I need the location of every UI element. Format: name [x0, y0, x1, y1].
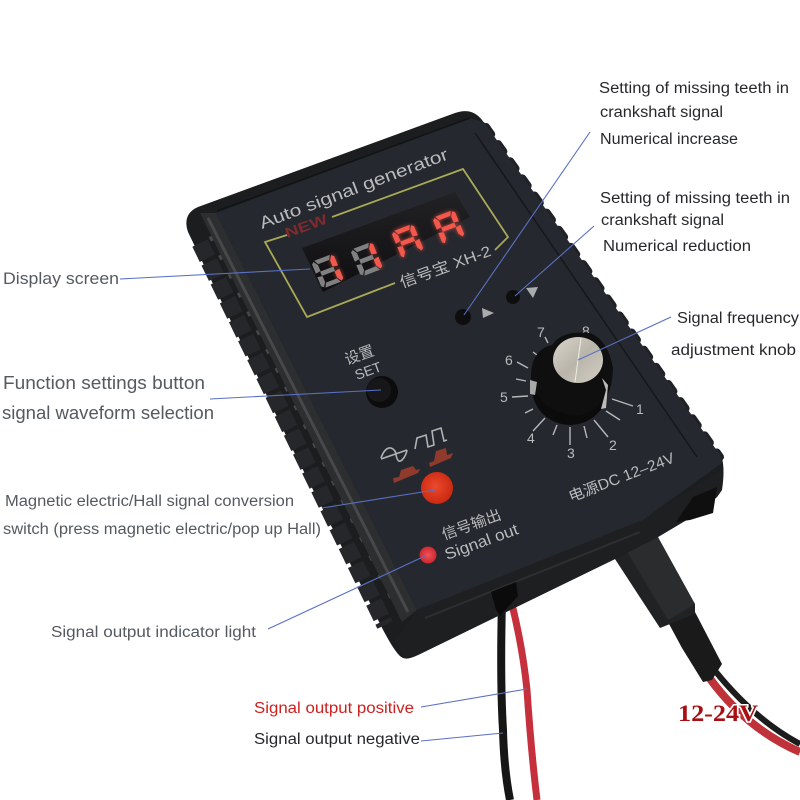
SET label	[343, 343, 384, 383]
increase button	[455, 309, 471, 325]
signal output wires	[501, 585, 537, 800]
front face	[216, 118, 722, 610]
label: missing teeth reduction	[600, 190, 790, 255]
signal out label: 信号输出	[440, 507, 504, 544]
frequency dial scale: 2	[609, 437, 617, 453]
decrease button	[506, 290, 520, 304]
label: missing teeth reduction: Numerical reduction	[603, 238, 751, 255]
display screen	[302, 192, 470, 292]
decrease arrow	[526, 287, 538, 298]
model label: 信号宝 XH-2	[398, 243, 494, 292]
waveform icons	[381, 428, 447, 461]
red conversion button	[421, 472, 453, 504]
frequency dial scale: 1	[636, 401, 644, 417]
signal output LED	[420, 546, 436, 564]
label: missing teeth increase: crankshaft signal	[600, 104, 723, 121]
set button	[366, 376, 398, 408]
power cable with connector	[613, 522, 800, 752]
digit glow	[328, 210, 465, 282]
device body	[186, 111, 723, 659]
signal out label	[440, 507, 521, 564]
label: signal output indicator light: Signal output indicator light	[51, 624, 257, 641]
digit 3	[391, 224, 424, 258]
label: signal output positive: Signal output positive	[254, 700, 414, 717]
lip edge highlight	[425, 532, 640, 618]
right edge scallops	[486, 127, 720, 457]
label: switch press: switch (press magnetic electric/pop up Hall)	[3, 521, 321, 538]
side fins: left	[200, 243, 385, 625]
increase arrow	[482, 308, 494, 318]
SET label: 设置	[343, 343, 377, 369]
label: display screen: Display screen	[3, 269, 119, 288]
frequency dial scale: 8	[582, 323, 590, 339]
label: missing teeth increase	[599, 80, 789, 148]
label: missing teeth reduction: crankshaft signal	[601, 212, 724, 229]
digit 1	[311, 254, 344, 289]
label: signal frequency knob: adjustment knob	[671, 342, 796, 359]
device outline	[186, 111, 723, 659]
label: missing teeth reduction: Setting of missing teeth in	[600, 190, 790, 207]
label: 12-24V: 12-24V	[678, 701, 758, 726]
NEW label: NEW	[283, 210, 330, 241]
left rim highlight	[208, 218, 408, 612]
frequency dial scale: 4	[527, 430, 535, 446]
lower lip	[396, 470, 722, 658]
label: signal frequency knob: Signal frequency	[677, 310, 799, 327]
leader lines	[120, 132, 671, 741]
power label: 电源DC 12–24V	[566, 450, 677, 506]
frequency dial scale: 6	[505, 352, 513, 368]
lip slot	[491, 582, 518, 616]
switch position icons	[393, 448, 453, 483]
label: function settings button: Function settings button	[3, 373, 205, 393]
label: magnetic electric/Hall conversion: Magnetic electric/Hall signal conversion	[5, 493, 294, 510]
right side port	[676, 487, 717, 522]
frequency dial scale	[500, 323, 644, 461]
SET label: SET	[353, 358, 384, 383]
display frame	[265, 169, 508, 317]
frequency dial scale: 5	[500, 389, 508, 405]
label: missing teeth increase: Numerical increase	[600, 131, 738, 148]
digit 4	[432, 210, 465, 244]
top groove	[217, 118, 470, 211]
left rim	[200, 213, 417, 622]
side pegs: left	[211, 236, 398, 610]
frequency knob	[530, 332, 613, 425]
label: signal output negative: Signal output negative	[254, 731, 420, 748]
label: signal frequency knob	[671, 310, 799, 359]
digit 2	[350, 242, 383, 277]
label: signal waveform selection: signal waveform selection	[2, 403, 214, 423]
frequency dial scale: 3	[567, 445, 575, 461]
product title on device: Auto signal generator	[257, 145, 451, 233]
frequency dial scale: 7	[537, 324, 545, 340]
right groove	[475, 133, 697, 457]
label: missing teeth increase: Setting of missing teeth in	[599, 80, 789, 97]
signal out label: Signal out	[443, 521, 521, 564]
